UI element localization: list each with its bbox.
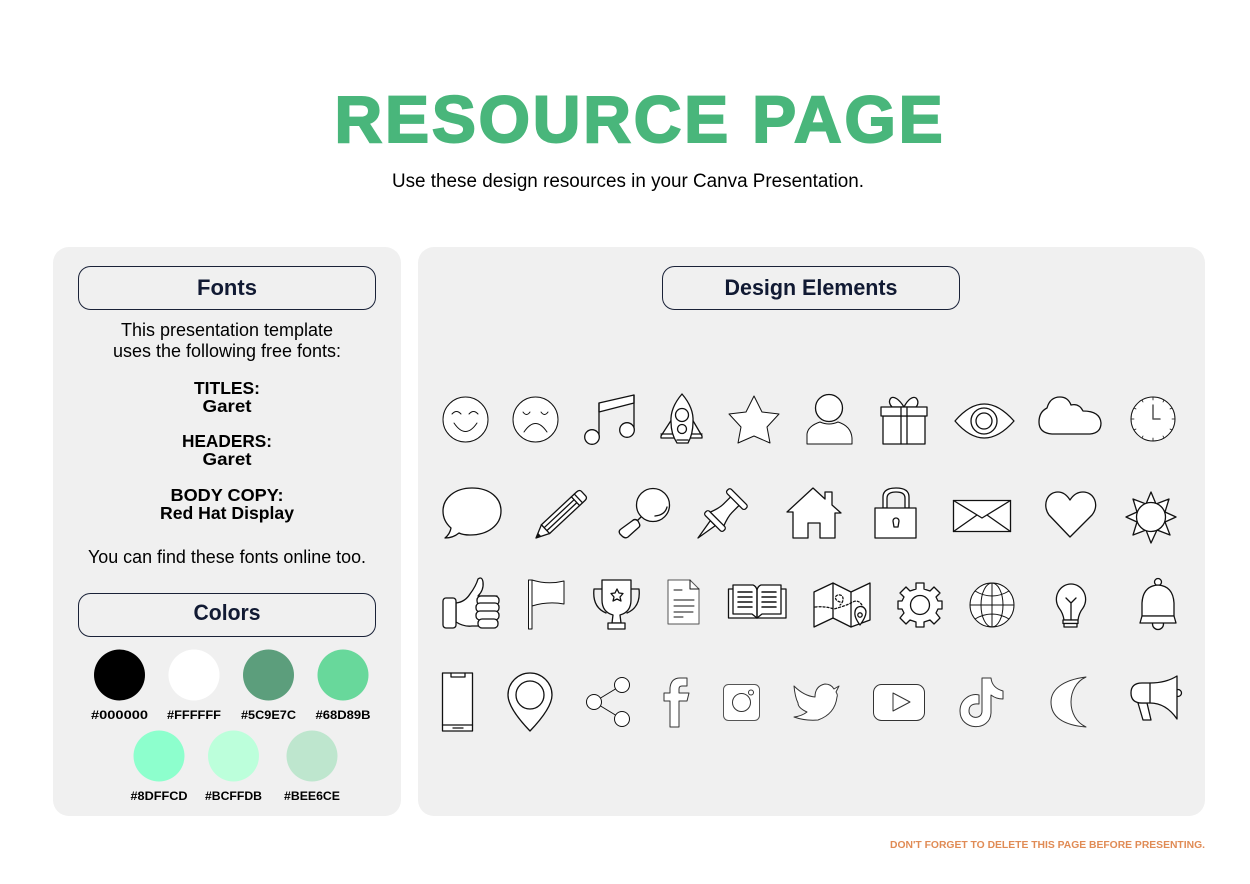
icon: facebook — [664, 678, 689, 727]
icon: sun — [1126, 492, 1176, 543]
text: font intro: This presentation template — [121, 319, 333, 340]
icon: flag — [528, 580, 564, 629]
text: titles font: TITLES: — [194, 378, 260, 398]
swatch: 5C9E7C — [241, 650, 296, 722]
panel: design elements — [418, 247, 1205, 816]
text: titles font — [194, 378, 260, 416]
panel: fonts and colors — [53, 247, 401, 816]
icon: person — [807, 394, 852, 444]
icon: padlock — [875, 488, 916, 538]
icon: document — [668, 580, 699, 624]
swatch: 68D89B: #68D89B — [316, 710, 370, 722]
swatch: BCFFDB — [205, 730, 262, 803]
text: headers font — [182, 431, 272, 469]
icon: share — [586, 678, 630, 726]
icon: smile — [443, 397, 488, 442]
text: body copy font: BODY COPY: — [170, 485, 284, 505]
swatch: 5C9E7C: #5C9E7C — [241, 710, 296, 722]
swatch: BCFFDB: #BCFFDB — [205, 791, 262, 803]
text: body copy font — [160, 485, 294, 523]
heading: fonts — [78, 266, 376, 310]
icon: moon — [1051, 677, 1086, 727]
icon: cloud — [1039, 397, 1101, 434]
swatch: FFFFFF — [167, 650, 221, 722]
subtitle: Use these design resources in your Canva Presentation. — [392, 171, 864, 192]
text: font intro — [113, 319, 341, 361]
swatch: 000000 — [91, 650, 148, 722]
icon: smartphone — [442, 673, 472, 731]
icon: push pin — [689, 488, 748, 547]
footer note: DON'T FORGET TO DELETE THIS PAGE BEFORE PRESENTING. — [890, 839, 1205, 851]
heading: design elements — [662, 266, 960, 310]
swatch: 68D89B — [316, 650, 370, 722]
text: font intro: uses the following free fonts: — [113, 340, 341, 361]
icon: light bulb — [1056, 584, 1086, 627]
icon: bell — [1140, 578, 1176, 630]
icon: magnifier — [619, 488, 670, 538]
icon: pencil — [532, 489, 588, 542]
heading: colors — [78, 594, 376, 636]
heading: design elements: Design Elements — [724, 275, 898, 300]
swatch: 000000: #000000 — [91, 710, 148, 722]
swatch: FFFFFF: #FFFFFF — [167, 710, 221, 722]
text: headers font: Garet — [202, 449, 252, 469]
icon: rocket — [661, 394, 702, 443]
text: titles font: Garet — [202, 396, 252, 416]
icon: sad face — [513, 397, 558, 442]
icon: gear — [898, 583, 942, 627]
text: body copy font: Red Hat Display — [160, 503, 294, 523]
icon: video play — [874, 684, 924, 720]
icon: star — [729, 396, 779, 443]
icon: speech bubble — [443, 488, 501, 538]
heading: colors: Colors — [194, 600, 260, 625]
text: headers font: HEADERS: — [182, 431, 272, 451]
swatch: 8DFFCD: #8DFFCD — [130, 791, 188, 803]
icon: map — [814, 583, 870, 627]
icon: heart — [1046, 492, 1096, 537]
icon: eye — [955, 404, 1014, 438]
icon: house — [787, 488, 841, 538]
icon: gift — [881, 397, 927, 444]
heading: fonts: Fonts — [197, 275, 257, 300]
icon: globe — [970, 583, 1014, 627]
icon: instagram — [724, 684, 760, 720]
icon: location pin — [508, 673, 552, 731]
text: fonts online note: You can find these fonts online too. — [88, 546, 366, 567]
swatch: BEE6CE — [284, 730, 340, 803]
icon: thumbs up — [443, 578, 499, 628]
title: RESOURCE PAGE — [335, 82, 945, 156]
icon: megaphone — [1131, 676, 1182, 720]
icon: envelope — [954, 500, 1010, 532]
swatch: 8DFFCD — [130, 730, 188, 803]
icon: twitter — [794, 684, 839, 720]
icon: clock — [1131, 397, 1175, 441]
icon: music note — [585, 395, 634, 444]
icon: trophy — [594, 580, 639, 629]
icon: tiktok — [960, 678, 1003, 727]
icon: open book — [728, 585, 786, 618]
swatch: BEE6CE: #BEE6CE — [284, 791, 340, 803]
